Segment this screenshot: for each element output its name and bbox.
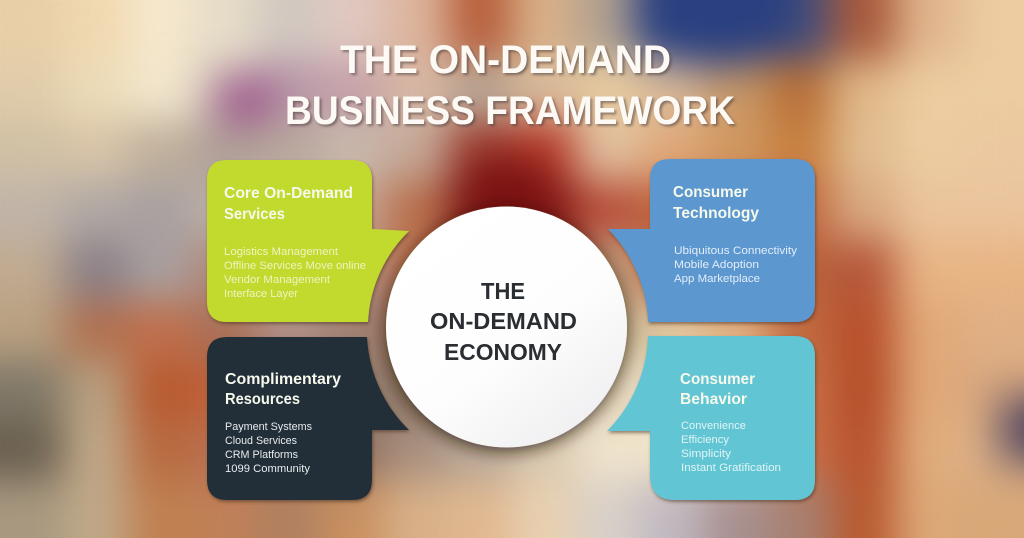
panel: complimentary resources: Complimentary bbox=[225, 371, 341, 388]
panel: complimentary resources: CRM Platforms bbox=[225, 449, 298, 461]
title bbox=[285, 38, 735, 133]
center circle: the on-demand economy: ECONOMY bbox=[444, 339, 562, 365]
panel: core on-demand services: Interface Layer bbox=[224, 288, 298, 300]
center circle: the on-demand economy bbox=[386, 206, 627, 448]
panel: consumer behavior: Behavior bbox=[680, 391, 747, 408]
panel: core on-demand services: Services bbox=[224, 206, 285, 223]
panel: consumer behavior: Consumer bbox=[680, 371, 755, 388]
panel: complimentary resources: 1099 Community bbox=[225, 463, 311, 475]
panel: consumer behavior: Efficiency bbox=[681, 434, 730, 446]
panel: consumer technology: Technology bbox=[673, 205, 759, 222]
panel: core on-demand services bbox=[207, 160, 409, 322]
panel: consumer technology: Mobile Adoption bbox=[674, 259, 759, 271]
panel: consumer behavior bbox=[607, 336, 815, 500]
panel: consumer behavior: Instant Gratification bbox=[681, 462, 781, 474]
panel: core on-demand services: Core On-Demand bbox=[224, 185, 353, 202]
title: BUSINESS FRAMEWORK bbox=[285, 89, 735, 133]
panel: complimentary resources bbox=[207, 337, 409, 500]
panel: consumer technology bbox=[608, 159, 815, 322]
panel: complimentary resources: Payment Systems bbox=[225, 421, 312, 433]
panel: consumer behavior: Simplicity bbox=[681, 448, 732, 460]
panel: complimentary resources: Cloud Services bbox=[225, 435, 297, 447]
center circle: the on-demand economy: THE bbox=[481, 278, 525, 304]
panel: complimentary resources: Resources bbox=[225, 391, 300, 408]
panel: consumer technology: Ubiquitous Connectivity bbox=[674, 245, 798, 257]
center circle: the on-demand economy: ON-DEMAND bbox=[430, 308, 577, 334]
panel: core on-demand services: Logistics Management bbox=[224, 246, 338, 258]
panel: consumer technology: Consumer bbox=[673, 184, 748, 201]
panel: core on-demand services: Vendor Management bbox=[224, 274, 330, 286]
panel: consumer technology: App Marketplace bbox=[674, 273, 760, 285]
panel: core on-demand services: Offline Services Move online bbox=[224, 260, 366, 272]
title: THE ON-DEMAND bbox=[340, 38, 671, 82]
panel: consumer behavior: Convenience bbox=[681, 420, 746, 432]
